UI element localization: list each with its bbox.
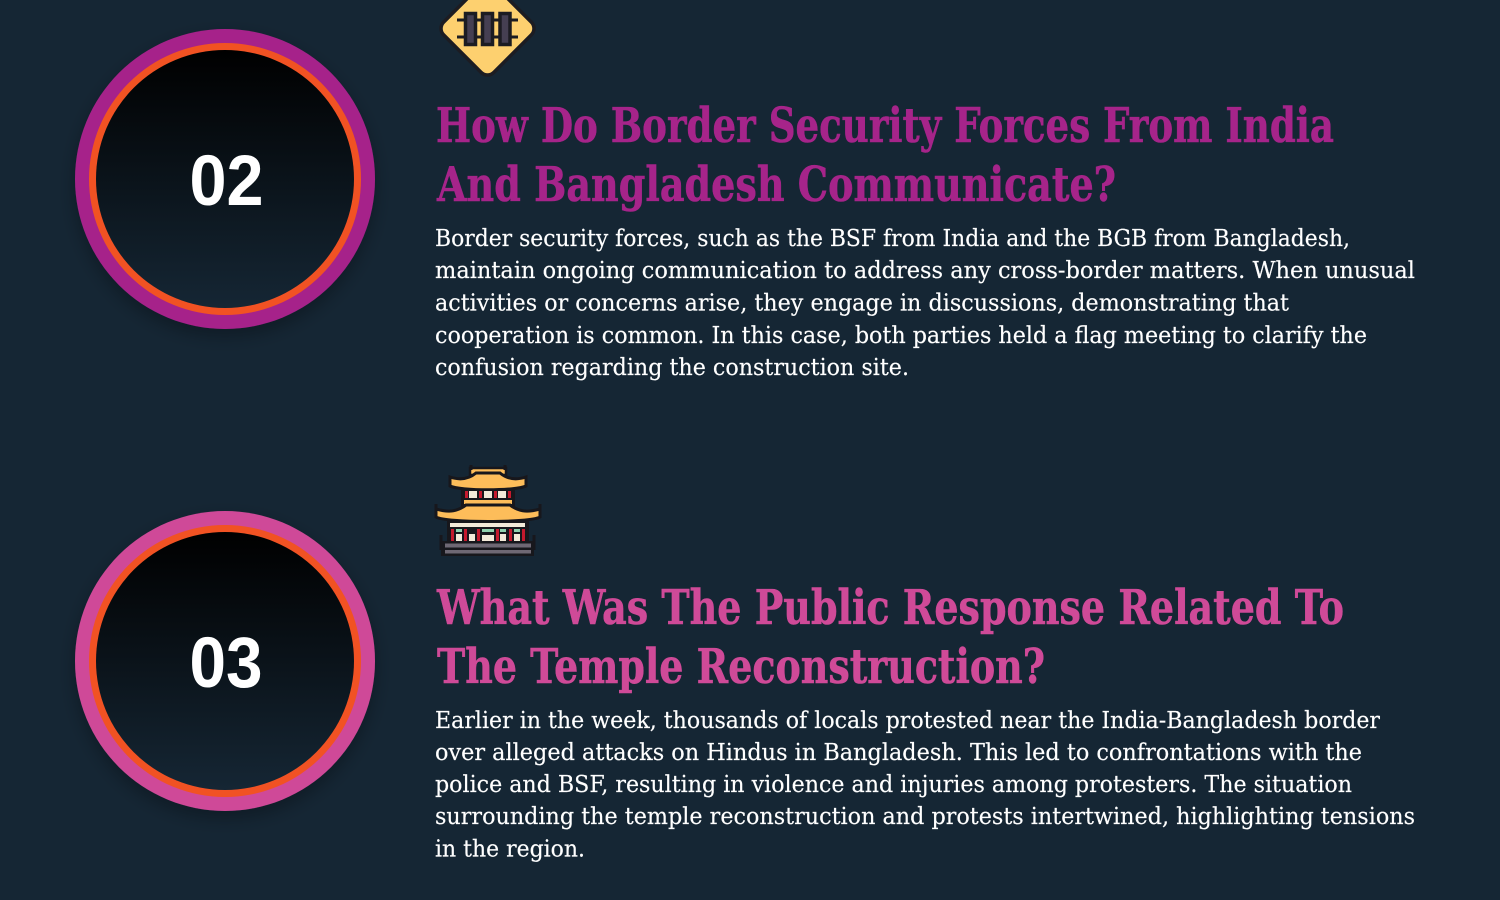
body text: section 03: police and BSF, resulting in violence and injuries among protesters. The situation (435, 772, 1352, 798)
body text: section 03: in the region. (435, 836, 585, 862)
body text: section 03 (435, 708, 1415, 862)
body text: section 02 (435, 226, 1415, 381)
number badge 02 (75, 29, 375, 329)
heading: section 03: The Temple Reconstruction? (437, 639, 1045, 695)
body text: section 02: activities or concerns arise, they engage in discussions, demonstrating that (435, 290, 1290, 316)
body text: section 02: cooperation is common. In this case, both parties held a flag meeting to clarify the (435, 323, 1367, 349)
body text: section 02: maintain ongoing communication to address any cross-border matters. When unusual (435, 258, 1415, 284)
body text: section 03: surrounding the temple reconstruction and protests intertwined, highlighting tensions (435, 804, 1415, 830)
number badge 02: 02 (190, 142, 264, 221)
panel: section 02 (75, 0, 1415, 381)
number badge 03: 03 (190, 624, 262, 703)
number badge 03 (75, 511, 375, 811)
heading: section 02: And Bangladesh Communicate? (436, 157, 1116, 213)
heading: section 02 (436, 98, 1334, 213)
body text: section 03: over alleged attacks on Hindus in Bangladesh. This led to confrontations with the (435, 740, 1362, 766)
body text: section 02: confusion regarding the construction site. (435, 355, 909, 381)
body text: section 02: Border security forces, such as the BSF from India and the BGB from Bangladesh, (435, 226, 1350, 252)
panel: section 03 (75, 465, 1415, 862)
icon: railway crossing sign (437, 0, 538, 79)
icon: temple (436, 465, 540, 556)
body text: section 03: Earlier in the week, thousands of locals protested near the India-Bangladesh border (435, 708, 1380, 734)
heading: section 03 (436, 580, 1344, 695)
